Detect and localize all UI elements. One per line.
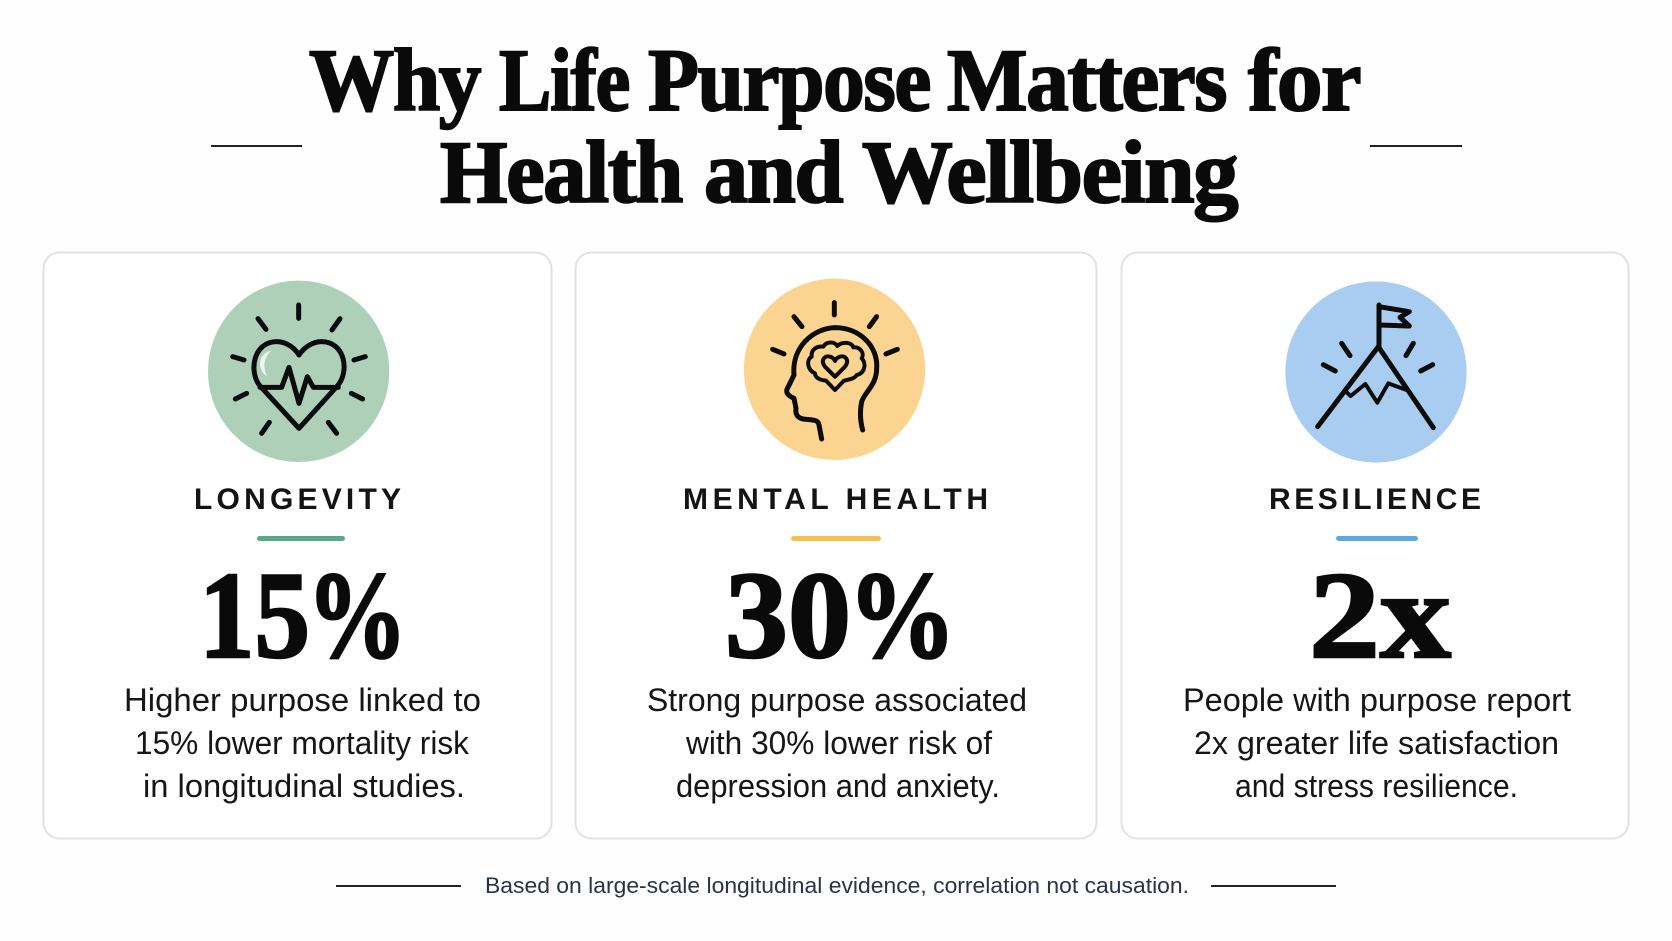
label: mental health: MENTAL HEALTH [683,483,988,516]
stat: 15%: 15 [199,547,310,684]
panel: longevity [44,252,552,838]
stat: 2x: 2x [1309,547,1451,684]
stat: 15% [199,547,407,684]
title: Matters [947,32,1226,130]
panel: resilience [1122,252,1628,838]
description: mental health: with 30% lower risk of [685,725,992,761]
description: longevity: Higher purpose linked to [124,682,481,718]
stat: 30%: 30 [725,547,851,684]
stat: 30% [725,547,956,684]
title: and [704,124,843,222]
description: resilience: 2x greater life satisfaction [1194,725,1559,761]
description: longevity [124,682,481,804]
title: Life [499,32,629,130]
accent bar: blue [1336,536,1418,541]
title: Health [440,124,683,222]
title [309,32,1360,222]
description: longevity: in longitudinal studies. [143,768,465,804]
description: mental health: Strong purpose associated [647,682,1027,718]
description: mental health [647,682,1027,804]
description: mental health: depression and anxiety. [676,768,1000,804]
stat: 15%: % [307,547,407,684]
description: resilience [1183,682,1571,804]
description: resilience: and stress resilience. [1235,768,1518,804]
title: Wellbeing [862,124,1238,222]
icon: mountain with flag [1285,281,1467,463]
accent bar: amber [791,536,881,541]
label: longevity: LONGEVITY [194,483,401,516]
title: Why [309,32,481,130]
description: longevity: 15% lower mortality risk [135,725,470,761]
title: Purpose [648,32,930,130]
stat: 30%: % [848,547,956,684]
description: resilience: People with purpose report [1183,682,1571,718]
title: for [1248,32,1360,130]
panel: mental health [576,252,1096,838]
footnote: Based on large-scale longitudinal evidence, correlation not causation. [485,873,1189,898]
icon: heart with pulse [208,281,389,462]
icon: head with brain and heart [744,279,925,460]
label: resilience: RESILIENCE [1269,483,1481,516]
accent bar: green [257,536,345,541]
